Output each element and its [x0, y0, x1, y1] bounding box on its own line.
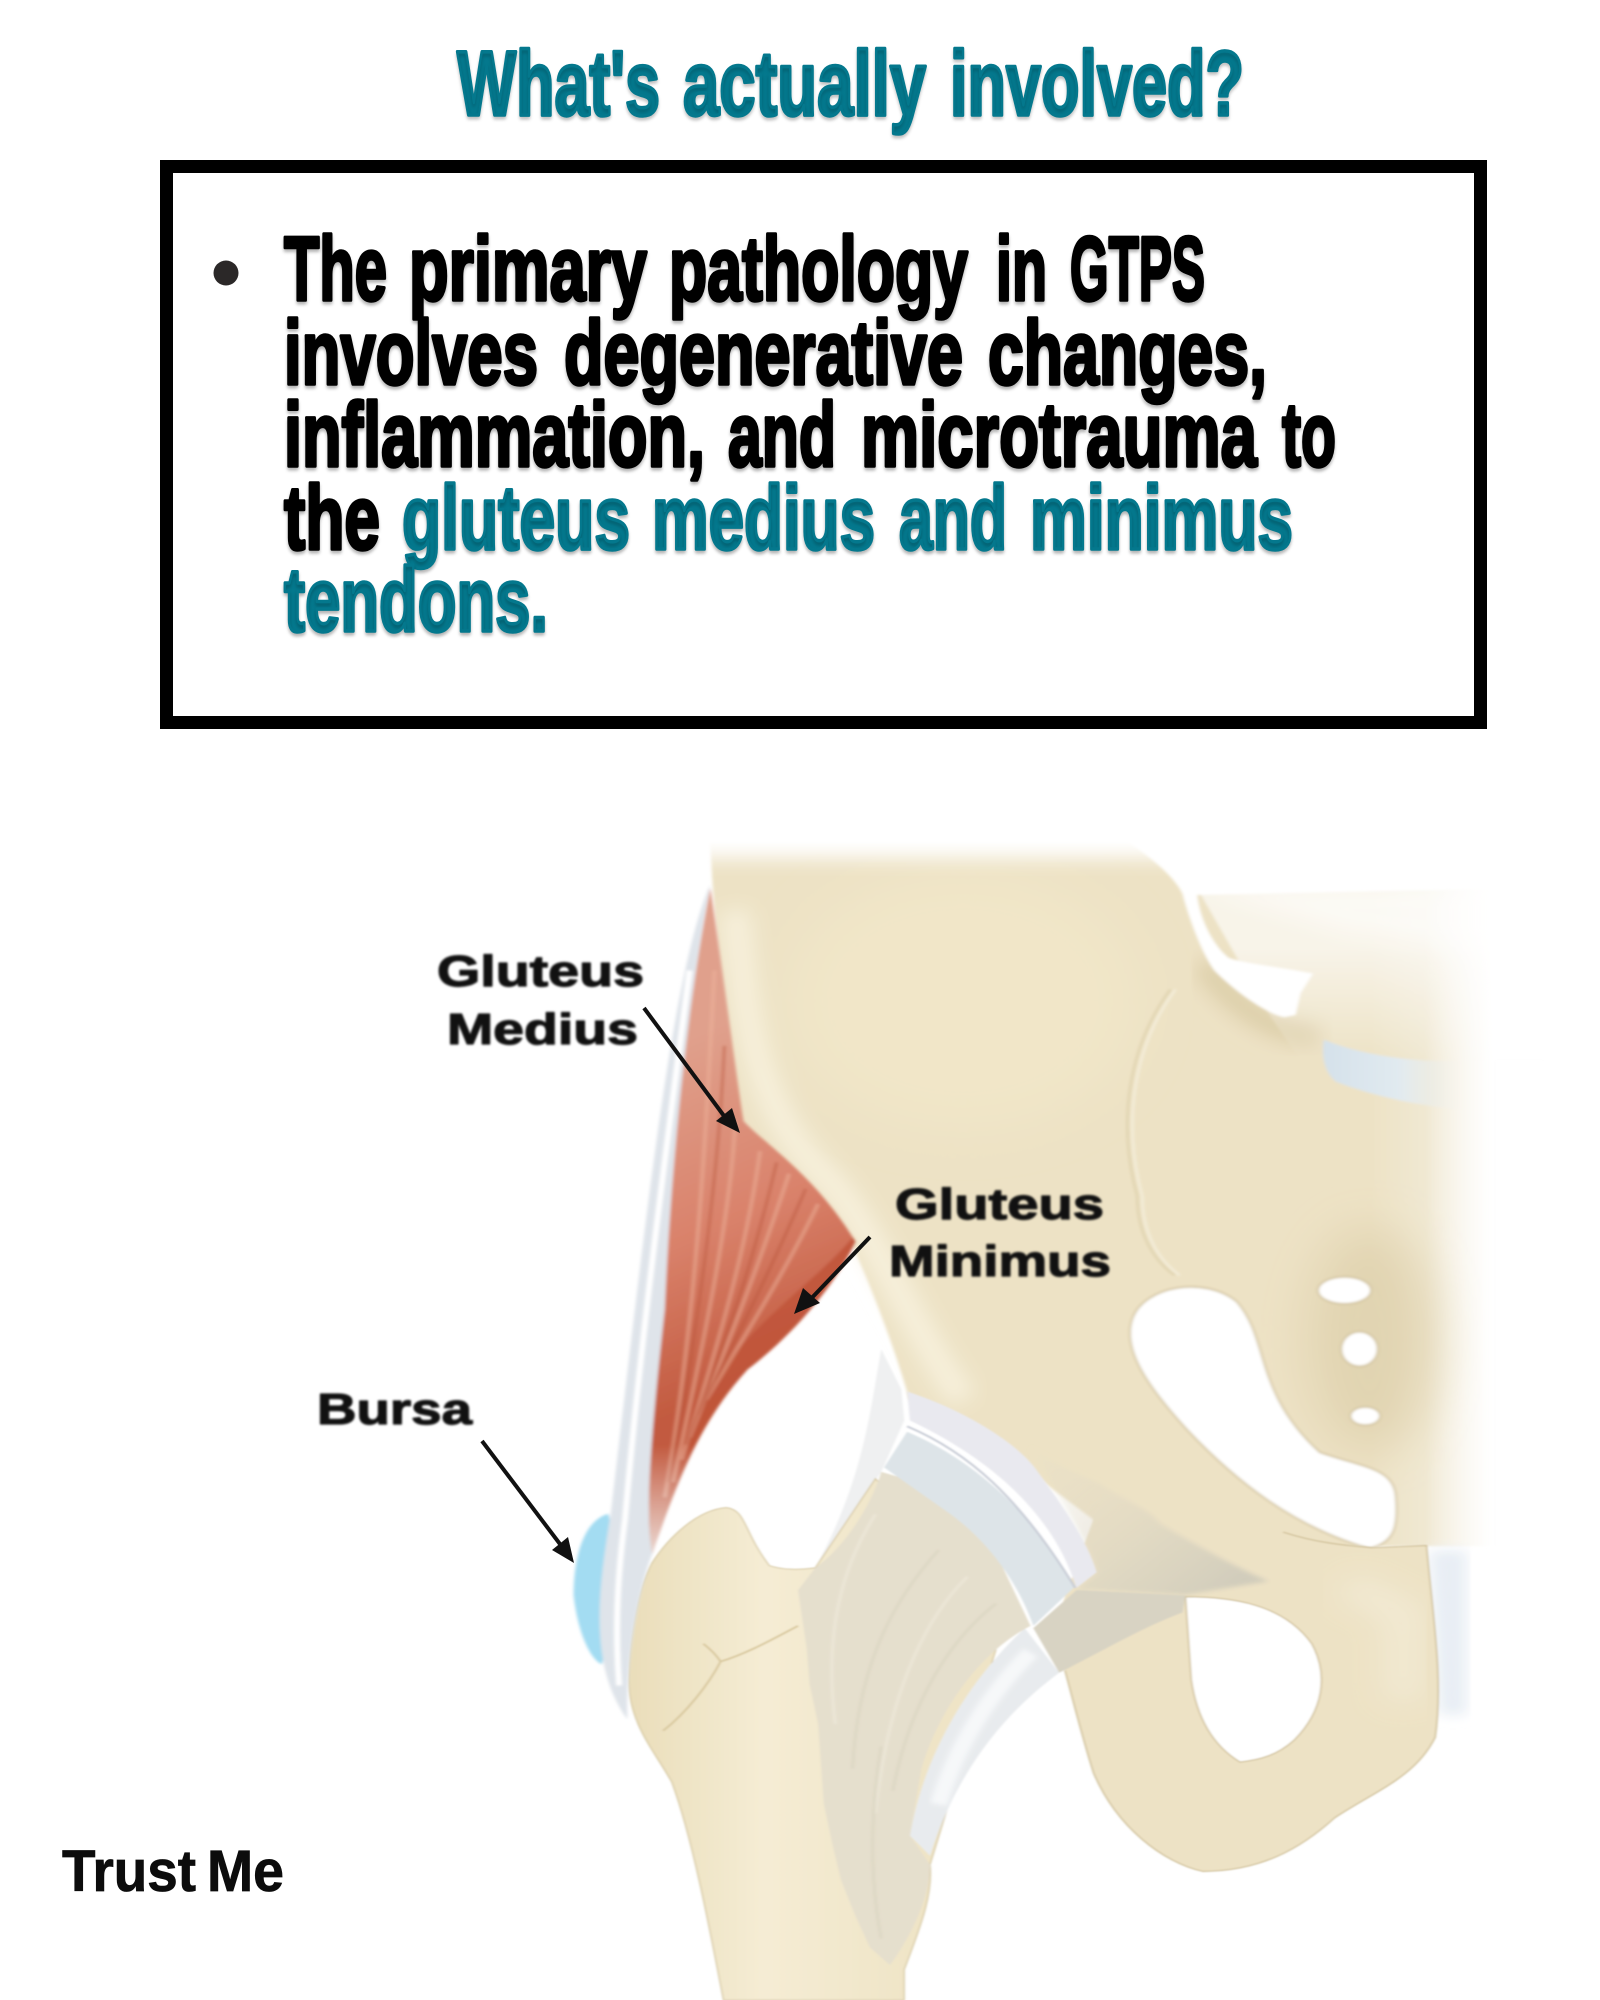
arrow: to gluteus minimus [794, 1237, 870, 1314]
ramus outer edge [1065, 1532, 1438, 1871]
outer white band [907, 1392, 1097, 1588]
band separation line [907, 1426, 1075, 1588]
statement text: the [284, 468, 380, 569]
capsule fibres [832, 1514, 996, 1938]
logo: Trust Me: Me [207, 1839, 284, 1904]
translucent capsule ligament [798, 1472, 1030, 1965]
pale capsule above femoral neck [815, 1349, 904, 1568]
bullet [214, 260, 238, 286]
pale soft tissue beside pubis [1429, 1550, 1467, 1715]
tendon highlight [617, 971, 690, 1685]
label: gluteus medius: Gluteus [437, 947, 644, 996]
label: bursa: Bursa [317, 1385, 473, 1434]
statement text: minimus [1030, 468, 1293, 569]
bone left warm tone [789, 873, 1137, 1129]
femur [629, 1479, 1002, 2000]
anatomy illustration: hip [572, 848, 1477, 2000]
arrow: to gluteus medius [644, 1008, 740, 1133]
ramus highlight [1346, 1586, 1404, 1702]
statement text: gluteus [402, 468, 630, 569]
muscle shade [690, 1238, 856, 1452]
statement text: primary [409, 219, 647, 320]
title [457, 33, 1244, 135]
sacrum pale overlay [1197, 888, 1544, 1076]
sacrum top fade [1197, 886, 1544, 955]
shade under notch [1204, 963, 1320, 1034]
statement text: changes, [988, 303, 1267, 404]
ilium bone [710, 843, 1544, 1546]
ligament white highlight [939, 1653, 1030, 1804]
ligament fanning to pubis [1030, 1447, 1269, 1595]
obturator foramen [1185, 1597, 1321, 1762]
sacral foramina [1318, 1277, 1380, 1425]
sacroiliac joint line [1127, 989, 1175, 1275]
statement text: inflammation, [284, 385, 705, 486]
white notch by sacrum [1183, 894, 1313, 1017]
statement text: GTPS [1070, 219, 1205, 320]
iliotibial tendon sheath [600, 884, 710, 1719]
label: gluteus medius [437, 947, 644, 1054]
lower translucent ligament [1033, 1590, 1185, 1673]
arrow: to bursa [482, 1441, 574, 1563]
label: gluteus medius: Medius [447, 1005, 638, 1054]
femur crest line [663, 1626, 798, 1731]
white iliofemoral ligament [910, 1628, 1059, 1856]
muscle lower fade [648, 1450, 691, 1553]
pelvis upper: ilium and sacrum [690, 797, 1568, 1549]
soft top edge of pelvis [690, 797, 1568, 858]
hip joint, femur and ramus [629, 1349, 1467, 2000]
title: actually [683, 33, 926, 135]
statement text [284, 219, 1336, 651]
statement text: in [996, 219, 1047, 320]
logo: Trust Me [62, 1839, 284, 1904]
solid bone centre [710, 843, 1374, 1546]
statement text: to [1282, 385, 1336, 486]
statement text: microtrauma [861, 385, 1258, 486]
gluteal muscles [647, 888, 858, 1553]
label: gluteus minimus: Minimus [889, 1237, 1111, 1286]
statement text: and [899, 468, 1007, 569]
panel border [166, 166, 1480, 722]
title: What's [457, 33, 660, 135]
shade around foramina [1307, 1226, 1432, 1452]
bone highlight along ridge [735, 910, 963, 1400]
muscle fibres [665, 971, 818, 1497]
logo: Trust Me: Trust [62, 1839, 196, 1904]
statement text: degenerative [564, 303, 963, 404]
statement text: involves [284, 303, 538, 404]
statement text: tendons. [284, 550, 548, 651]
statement text: medius [652, 468, 875, 569]
label: gluteus minimus: Gluteus [895, 1180, 1104, 1229]
statement text: The [284, 219, 387, 320]
bursa [574, 1514, 615, 1664]
label: gluteus minimus [889, 1180, 1111, 1286]
statement text: and [728, 385, 836, 486]
sacroiliac joint highlight [1132, 989, 1180, 1275]
sciatic notch [1130, 1287, 1397, 1549]
title: involved? [950, 33, 1244, 135]
pubic and ischial ramus [1059, 1487, 1438, 1871]
statement text: pathology [669, 219, 968, 320]
dark muscle fibres [669, 1046, 806, 1482]
intervertebral disc [1323, 1040, 1461, 1110]
inner blue-grey band [884, 1432, 1074, 1626]
panel: primary pathology statement [166, 166, 1480, 722]
muscle, tendon and bursa [574, 880, 880, 1719]
